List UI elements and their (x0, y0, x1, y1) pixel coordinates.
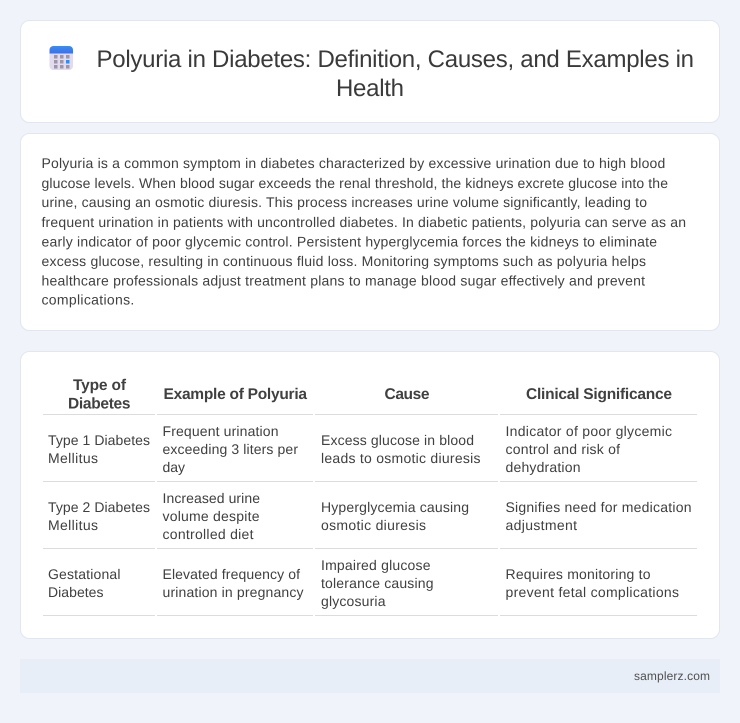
table row: gestational: Elevated frequency of (162, 566, 300, 582)
table row: type 2: controlled diet (162, 526, 254, 542)
title: Health (336, 75, 404, 102)
table row: type 1: control and risk of (506, 441, 620, 457)
table row: gestational: Impaired glucose (321, 557, 431, 573)
table row: type 1: Type 1 Diabetes (48, 432, 150, 448)
table row: type 2: Signifies need for medication (506, 499, 692, 515)
table row: type 2 (48, 490, 692, 542)
text block: polyuria description (42, 155, 686, 308)
table row: type 2: Increased urine (162, 490, 260, 506)
header panel (20, 20, 720, 122)
text block: polyuria description: Polyuria is a common symptom in diabetes characterized by excessive urination due to high blood (42, 155, 665, 171)
footer text: samplerz.com (634, 669, 710, 683)
table row: gestational: Gestational (48, 566, 120, 582)
table row: type 1 (48, 423, 672, 475)
table row: gestational: tolerance causing (321, 575, 434, 591)
table row: type 2: adjustment (506, 517, 577, 533)
table header row: Example of Polyuria (164, 386, 307, 403)
table header row: Clinical Significance (526, 386, 672, 403)
table row: gestational (48, 557, 679, 609)
text block: polyuria description: glucose levels. When blood sugar exceeds the renal threshold, the kidneys excrete glucose into the (42, 175, 668, 191)
table row: type 2: volume despite (162, 508, 260, 524)
table row: gestational: Requires monitoring to (506, 566, 651, 582)
icon: calendar (50, 46, 73, 70)
title: Polyuria in Diabetes: Definition, Causes, and Examples in (96, 46, 694, 73)
title (96, 46, 694, 102)
table row: gestational: Diabetes (48, 584, 104, 600)
footer bar (20, 659, 720, 693)
table row: type 1: Excess glucose in blood (321, 432, 474, 448)
panel: introduction (20, 134, 720, 330)
table row: gestational: glycosuria (321, 593, 386, 609)
table row: type 2: osmotic diuresis (321, 517, 426, 533)
table row: type 1: day (162, 459, 185, 475)
text block: polyuria description: healthcare professionals adjust treatment plans to manage blood sugar effectively and prevent (42, 272, 645, 288)
text block: polyuria description: urine, causing an osmotic diuresis. This process increases urine volume significantly, leading to (42, 194, 647, 210)
table row: type 1: dehydration (506, 459, 580, 475)
table header row (68, 377, 672, 412)
panel: comparison table (20, 352, 720, 638)
text block: polyuria description: complications. (42, 292, 134, 308)
table row: type 1: Frequent urination (162, 423, 278, 439)
text block: polyuria description: early indicator of poor glycemic control. Persistent hyperglycemia forces the kidneys to eliminate (42, 234, 657, 250)
text block: polyuria description: frequent urination in patients with uncontrolled diabetes. In diabetic patients, polyuria can serve as an (42, 214, 686, 230)
table row: type 1: leads to osmotic diuresis (321, 450, 480, 466)
table row lines (43, 414, 697, 616)
table header row: Diabetes (68, 396, 130, 412)
table row: gestational: urination in pregnancy (162, 584, 304, 600)
table row: type 1: Mellitus (48, 450, 98, 466)
table header row: Cause (384, 386, 430, 403)
table row: type 2: Mellitus (48, 517, 98, 533)
table row: type 2: Hyperglycemia causing (321, 499, 469, 515)
table row: gestational: prevent fetal complications (506, 584, 679, 600)
table row: type 2: Type 2 Diabetes (48, 499, 150, 515)
table header row: Type of (73, 377, 127, 394)
table row: type 1: exceeding 3 liters per (162, 441, 298, 457)
text block: polyuria description: excess glucose, resulting in continuous fluid loss. Monitoring symptoms such as polyuria helps (42, 253, 646, 269)
table row: type 1: Indicator of poor glycemic (506, 423, 672, 439)
